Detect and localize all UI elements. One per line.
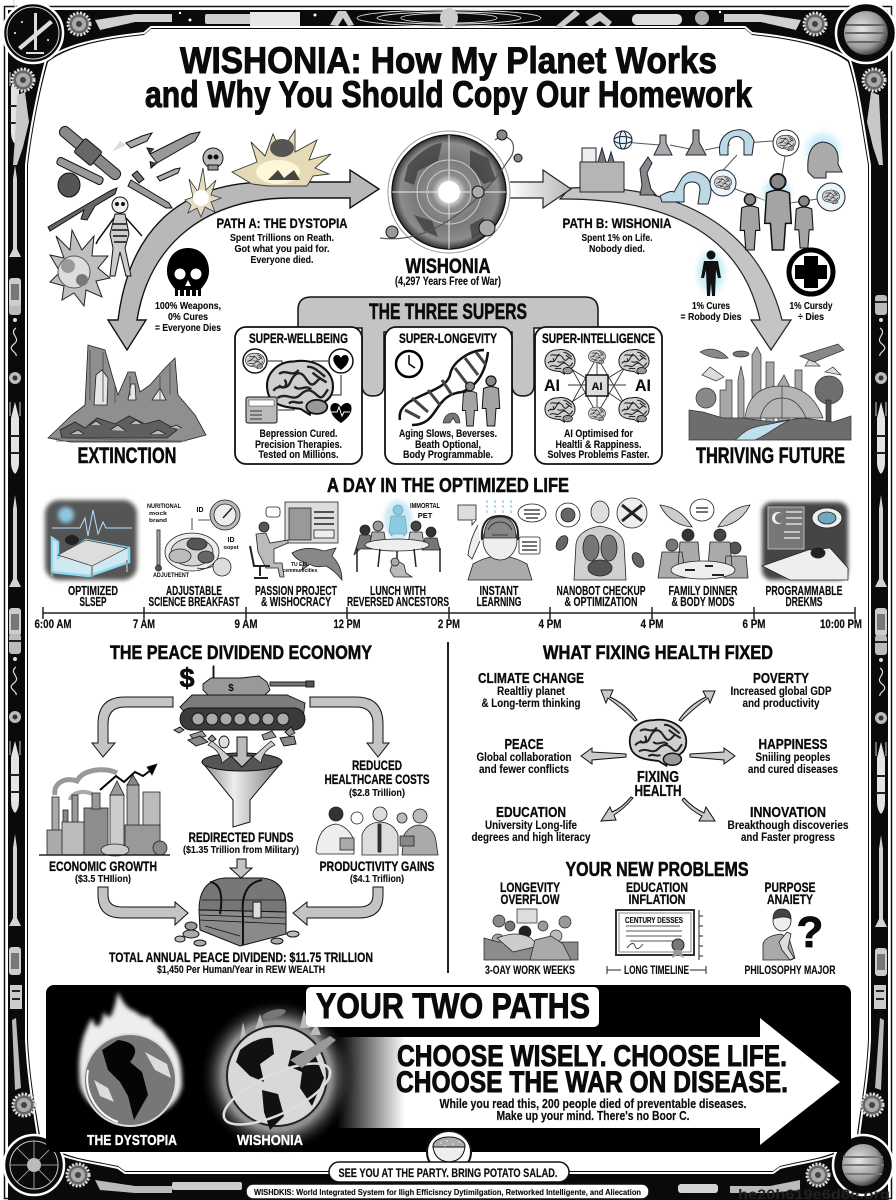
banner: see you at the party: SEE YOU AT THE PARTY. BRING POTATO SALAD.: [338, 1166, 558, 1180]
label: thriving future: THRIVING FUTURE: [696, 443, 845, 468]
icon: medical cross: [789, 250, 833, 294]
heading: peace dividend economy: THE PEACE DIVIDEND ECONOMY: [110, 643, 372, 664]
text: redirected funds: ($1.35 Trillion from Military): [183, 844, 299, 856]
card: super-longevity: Aging Slows, Beverses.: [399, 428, 497, 440]
text: happiness: and cured diseases: [748, 764, 838, 776]
timeline labels: OPTIMIZED: [68, 584, 118, 598]
text: climate change: & Long-term thinking: [482, 698, 580, 710]
illustration: Wishonia globe: [199, 998, 355, 1154]
timeline axis: 12 PM: [334, 617, 360, 631]
heading: your new problems: YOUR NEW PROBLEMS: [566, 859, 748, 881]
icon: nanobot checkup: [554, 498, 647, 580]
text: innovation: [728, 805, 848, 844]
text: productivity gains: PRODUCTIVITY GAINS: [320, 859, 434, 874]
banner: see you at the party: [329, 1162, 569, 1182]
text: total annual peace dividend: $1,450 Per Human/Year in REW WEALTH: [157, 964, 325, 976]
panel: education inflation: LONG TIMELINE: [624, 965, 689, 977]
title: and Why You Should Copy Our Homework: [145, 74, 752, 115]
text: innovation: Breakthough discoveries: [728, 820, 848, 832]
text: path A: PATH A: THE DYSTOPIA: [216, 215, 348, 231]
timeline labels: [68, 584, 842, 609]
text: economic growth: ($3.5 THIlion): [75, 873, 131, 885]
timeline axis: 4 PM: [640, 617, 664, 631]
text: cursdy equation: [790, 300, 833, 323]
timeline axis: 6:00 AM: [34, 617, 72, 631]
panel: education inflation: [607, 880, 706, 977]
icon: glowing human figure: [691, 243, 731, 301]
illustration: ground explosion: [50, 230, 110, 306]
timeline labels: & WISHOCRACY: [261, 595, 331, 609]
timeline labels: SLSEP: [80, 595, 106, 609]
text: poverty: and productivity: [742, 698, 820, 710]
label: fixing health: FIXING: [637, 769, 679, 786]
timeline labels: PROGRAMMABLE: [766, 584, 842, 598]
text: total annual peace dividend: [109, 950, 373, 976]
text: education: [472, 805, 591, 844]
text: climate change: Realtliy planet: [497, 686, 565, 698]
icon: adjustable science breakfast: brand: [149, 518, 167, 524]
heading tab: [298, 297, 598, 396]
icon: optimized sleep: [45, 500, 137, 580]
text: total annual peace dividend: TOTAL ANNUAL PEACE DIVIDEND: $11.75 TRILLION: [109, 950, 373, 965]
timeline labels: PASSION PROJECT: [255, 584, 337, 598]
heading box: your two paths: YOUR TWO PATHS: [316, 987, 590, 1026]
timeline labels: SCIENCE BREAKFAST: [148, 595, 240, 609]
timeline axis: [34, 607, 862, 631]
label: fixing health: HEALTH: [634, 783, 682, 800]
label: fixing health: [634, 769, 682, 800]
text: reduced healthcare costs: [324, 758, 430, 799]
timeline labels: FAMILY DINNER: [668, 584, 738, 598]
label: Wishonia: (4,297 Years Free of War): [395, 276, 501, 288]
icon: adjustable science breakfast: ID: [228, 537, 234, 544]
text: redirected funds: [183, 830, 299, 856]
text: path A: Got what you paid for.: [234, 243, 330, 255]
icon: adjustable science breakfast: ID: [196, 507, 204, 514]
card: super-longevity: Body Programmable.: [403, 449, 493, 461]
icon: instant learning: [458, 500, 546, 580]
call to action: [396, 1040, 788, 1123]
panel: purpose anxiety: [744, 880, 836, 977]
card: super-wellbeing: Tested on Millions.: [258, 449, 338, 461]
icon: adjustable science breakfast: oopst: [224, 545, 239, 551]
icon: passion project: cemmunicities: [283, 568, 318, 574]
text: productivity gains: [320, 859, 434, 885]
timeline axis: 6 PM: [742, 617, 766, 631]
card: super-longevity: SUPER-LONGEVITY: [399, 330, 497, 346]
text: happiness: HAPPINESS: [758, 737, 828, 753]
text: cursdy equation: 1% Cursdy: [790, 300, 833, 312]
card: super-wellbeing: [235, 327, 362, 464]
card: super-longevity: [385, 327, 512, 464]
text: education: University Long-life: [485, 820, 577, 832]
flow arrow: productivity to chest: [293, 887, 383, 925]
illustration: factories and city growth: [39, 764, 170, 856]
medallion top right: [836, 3, 896, 63]
icon: potato salad bowl: [427, 1131, 471, 1173]
card: super-intelligence: AI Optimised for: [564, 428, 634, 440]
label: extinction: EXTINCTION: [78, 443, 176, 468]
panel: education inflation: EDUCATION: [626, 880, 688, 895]
text: path A: Spent Trillions on Reath.: [230, 232, 334, 244]
panel: longevity overflow: [484, 880, 578, 977]
timeline labels: LEARNING: [476, 595, 522, 609]
flow arrow: tank to growth: [92, 697, 173, 757]
section divider: [447, 642, 449, 973]
card: super-intelligence: AI: [544, 376, 560, 395]
text: happiness: Sniiling peoples: [756, 752, 830, 764]
text: education: EDUCATION: [496, 805, 566, 821]
icon: adjustable science breakfast: mock: [149, 511, 168, 517]
illustration: funnel with down arrow: [202, 737, 282, 827]
timeline labels: ADJUSTABLE: [166, 584, 222, 598]
card: super-wellbeing: Bepression Cured.: [260, 428, 338, 440]
big arrow: [337, 1018, 840, 1145]
label: Wishonia: WISHONIA: [406, 255, 490, 278]
heading: what fixing health fixed: WHAT FIXING HEALTH FIXED: [543, 643, 773, 664]
text: weapons equation: [155, 300, 221, 334]
text: peace: PEACE: [504, 737, 544, 753]
card: super-intelligence: Healtli & Rappiness.: [556, 439, 642, 451]
text: path A: Everyone died.: [250, 254, 314, 266]
timeline labels: INSTANT: [480, 584, 519, 598]
illustration: Wishonia globe: [380, 130, 522, 253]
icon: lunch with reversed ancestors: PET: [418, 511, 433, 520]
icon: programmable dreams: [762, 502, 848, 580]
illustration: large explosion: [232, 130, 331, 186]
icon: adjustable science breakfast: NURITIONAL: [147, 503, 181, 510]
card: super-intelligence: SUPER-INTELLIGENCE: [542, 330, 655, 346]
medallion bottom left: [4, 1135, 64, 1195]
icon: dollar sign: $: [179, 663, 195, 693]
text: education: degrees and high literacy: [472, 832, 591, 844]
timeline axis: 7 AM: [133, 617, 155, 631]
text: poverty: POVERTY: [753, 671, 809, 687]
icon: passion project: [250, 502, 342, 580]
icon: adjustable science breakfast: ADJUETHENT: [153, 573, 189, 579]
text: cursdy equation: ÷ Dies: [798, 311, 824, 323]
illustration: future city: [689, 344, 851, 440]
text: innovation: INNOVATION: [750, 805, 826, 821]
small down arrow: [230, 859, 252, 878]
timeline axis: 10:00 PM: [820, 617, 862, 631]
panel: purpose anxiety: PHILOSOPHY MAJOR: [744, 965, 836, 977]
title: [145, 40, 752, 115]
text: climate change: [478, 671, 584, 710]
icon: passion project: TU EDL: [291, 562, 309, 568]
illustration: money tank: $: [228, 683, 234, 694]
panel: purpose anxiety: ANAIETY: [767, 892, 813, 907]
illustration: ruins: [48, 345, 206, 442]
panel: education inflation: INFLATION: [628, 892, 686, 907]
medallion top left: [3, 3, 63, 63]
banner: wishonia acronym: [246, 1184, 649, 1199]
text: economic growth: ECONOMIC GROWTH: [49, 859, 157, 874]
illustration: money tank: [174, 666, 314, 748]
text: innovation: and Faster progress: [741, 832, 835, 844]
card: super-longevity: Beath Optional,: [415, 439, 481, 451]
text: path B: [562, 215, 672, 255]
timeline labels: & BODY MODS: [672, 595, 734, 609]
timeline axis: 4 PM: [538, 617, 562, 631]
text: happiness: [748, 737, 838, 776]
timeline labels: NANOBOT CHECKUP: [556, 584, 646, 598]
text: weapons equation: 100% Weapons,: [155, 300, 221, 312]
illustration: treasure chest: [175, 878, 299, 946]
timeline axis: 9 AM: [234, 617, 258, 631]
card: super-intelligence: [535, 327, 662, 464]
text: poverty: [730, 671, 832, 710]
radial arrows: [581, 690, 735, 821]
text: path B: PATH B: WISHONIA: [562, 215, 672, 231]
timeline labels: LUNCH WITH: [370, 584, 426, 598]
arrow: path A to extinction: [108, 170, 379, 350]
illustration: healthcare workers: [316, 807, 438, 855]
medallion bottom right: [833, 1135, 893, 1195]
card: super-wellbeing: SUPER-WELLBEING: [249, 330, 348, 346]
panel: longevity overflow: 3-OAY WORK WEEKS: [485, 965, 575, 977]
card: super-intelligence: Solves Problems Faster.: [548, 449, 650, 461]
panel: the three supers: [235, 297, 662, 464]
illustration: burning dystopia globe: [79, 992, 182, 1126]
card: super-intelligence: AI: [592, 381, 602, 393]
panel: purpose anxiety: PURPOSE: [764, 880, 816, 895]
flow arrow: growth to chest: [98, 887, 188, 925]
flow arrow: tank to healthcare: [310, 697, 389, 757]
text: peace: [476, 737, 572, 776]
panel: education inflation: CENTURY DESSES: [625, 916, 684, 925]
text: productivity gains: ($4.1 Triflion): [350, 873, 404, 885]
illustration: health technology network: [580, 126, 847, 250]
text: path B: Spent 1% on Life.: [582, 232, 653, 244]
icon: lunch with reversed ancestors: IMMORTAL: [410, 501, 440, 510]
call to action: CHOOSE WISELY. CHOOSE LIFE.: [397, 1040, 787, 1073]
timeline illustrations: [45, 498, 848, 580]
text: weapons equation: = Everyone Dies: [155, 322, 221, 334]
label: Wishonia: [395, 255, 501, 288]
label: wishonia: WISHONIA: [237, 1132, 303, 1149]
icon: lunch with reversed ancestors: [354, 500, 440, 577]
panel: your two paths: [46, 985, 851, 1154]
icon: adjustable science breakfast: [147, 500, 240, 579]
text: reduced healthcare costs: HEALTHCARE COSTS: [324, 772, 430, 787]
heading: a day in the optimized life: A DAY IN THE OPTIMIZED LIFE: [327, 475, 569, 497]
text: cures equation: 1% Cures: [692, 300, 730, 312]
panel: longevity overflow: OVERFLOW: [500, 892, 560, 907]
card: super-intelligence: AI: [635, 376, 651, 395]
text: peace: Global collaboration: [476, 752, 572, 764]
text: peace: and fewer conflicts: [479, 764, 569, 776]
text: path B: Nobody died.: [589, 243, 645, 255]
icon: skull: [167, 248, 209, 296]
banner: wishonia acronym: WISHDKIS: World Integrated System for Iligh Efficisncy Dytimilgation, Retworked Intelligente, and Aliecation: [254, 1187, 641, 1197]
call to action: CHOOSE THE WAR ON DISEASE.: [396, 1066, 788, 1099]
arrow: path B to thriving future: [510, 170, 791, 350]
text: reduced healthcare costs: ($2.8 Trillion): [349, 787, 405, 799]
timeline axis: 2 PM: [438, 617, 460, 631]
timeline labels: REVERSED ANCESTORS: [347, 595, 449, 609]
text: reduced healthcare costs: REDUCED: [352, 758, 402, 773]
label: the dystopia: THE DYSTOPIA: [87, 1132, 177, 1149]
text: weapons equation: 0% Cures: [168, 311, 208, 323]
card: super-wellbeing: Precision Therapies.: [255, 439, 342, 451]
text: cures equation: = Robody Dies: [680, 311, 742, 323]
illustration: small explosion: [185, 168, 221, 217]
text: economic growth: [49, 859, 157, 885]
illustration: weapons collage: [48, 124, 223, 276]
illustration: central brain: [630, 720, 686, 766]
call to action: Make up your mind. There's no Boor C.: [496, 1109, 690, 1123]
panel: purpose anxiety: ?: [797, 908, 823, 957]
text: poverty: Increased global GDP: [730, 686, 832, 698]
heading tab: THE THREE SUPERS: [369, 299, 527, 324]
call to action: While you read this, 200 people died of preventable diseases.: [440, 1097, 746, 1111]
timeline labels: DREKMS: [786, 595, 822, 609]
text: redirected funds: REDIRECTED FUNDS: [188, 830, 294, 845]
timeline labels: & OPTIMIZATION: [564, 595, 638, 609]
text: cures equation: [680, 300, 742, 323]
text: path A: [216, 215, 348, 266]
title: WISHONIA: How My Planet Works: [180, 40, 717, 81]
icon: family dinner: [658, 499, 750, 579]
panel: longevity overflow: LONGEVITY: [500, 880, 560, 895]
text: climate change: CLIMATE CHANGE: [478, 671, 584, 687]
